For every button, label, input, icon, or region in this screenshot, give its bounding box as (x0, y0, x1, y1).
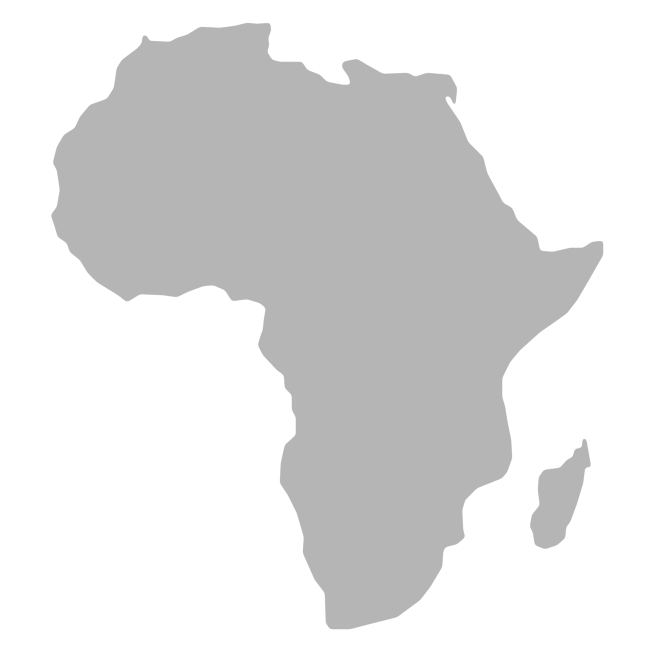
madagascar (530, 438, 591, 549)
africa mainland (51, 23, 603, 629)
